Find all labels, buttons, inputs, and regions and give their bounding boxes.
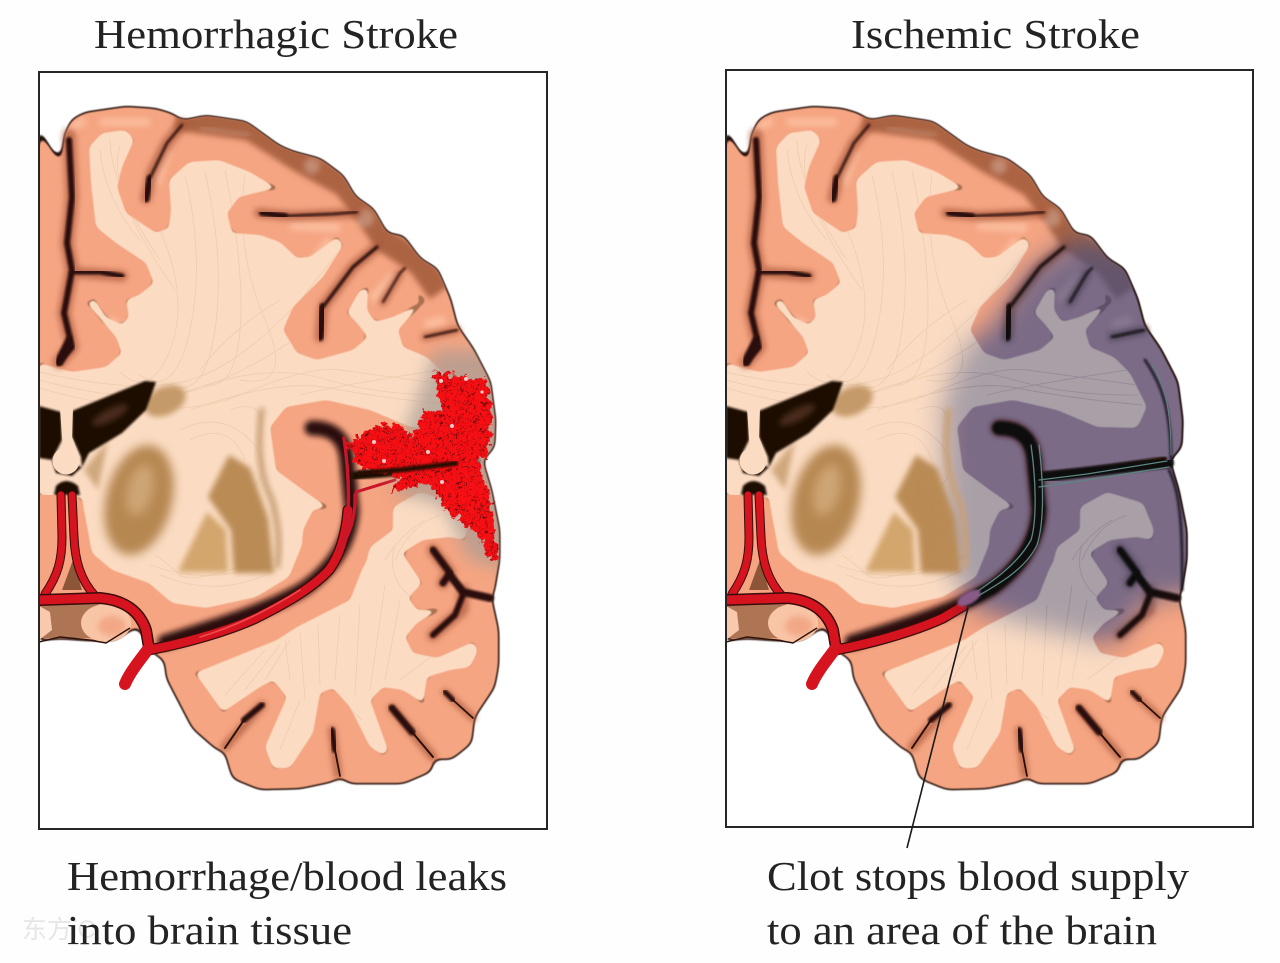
clot in the middle cerebral artery [956,588,982,608]
ischemic zone: purple oxygen-starved tissue [926,227,1188,658]
caption: ischemic stroke: to an area of the brain [767,907,1157,953]
title: Ischemic Stroke: Ischemic Stroke [851,11,1140,57]
arrow: pointer line from caption to clot [907,608,968,848]
caption: hemorrhagic stroke: Hemorrhage/blood leaks [67,853,507,899]
caption: hemorrhagic stroke [67,853,507,953]
caption: ischemic stroke: Clot stops blood supply [767,853,1190,899]
panel: ischemic stroke brain illustration [724,70,1253,827]
arteries up to the clot [726,495,963,684]
caption: ischemic stroke [767,853,1190,953]
title: Hemorrhagic Stroke: Hemorrhagic Stroke [94,11,458,57]
panel: hemorrhagic stroke brain illustration [37,72,547,829]
watermark: 东方iC [22,916,96,944]
brain cross-section, left panel [37,107,510,789]
hemorrhage surrounding discoloured tissue [395,350,510,570]
arteries: anterior and middle cerebral [39,438,395,684]
dark blocked vessels with teal highlights [967,360,1182,600]
brain cross-section, right panel [724,107,1186,789]
hemorrhage: leaked blood [348,373,498,560]
caption: hemorrhagic stroke: into brain tissue [67,907,352,953]
